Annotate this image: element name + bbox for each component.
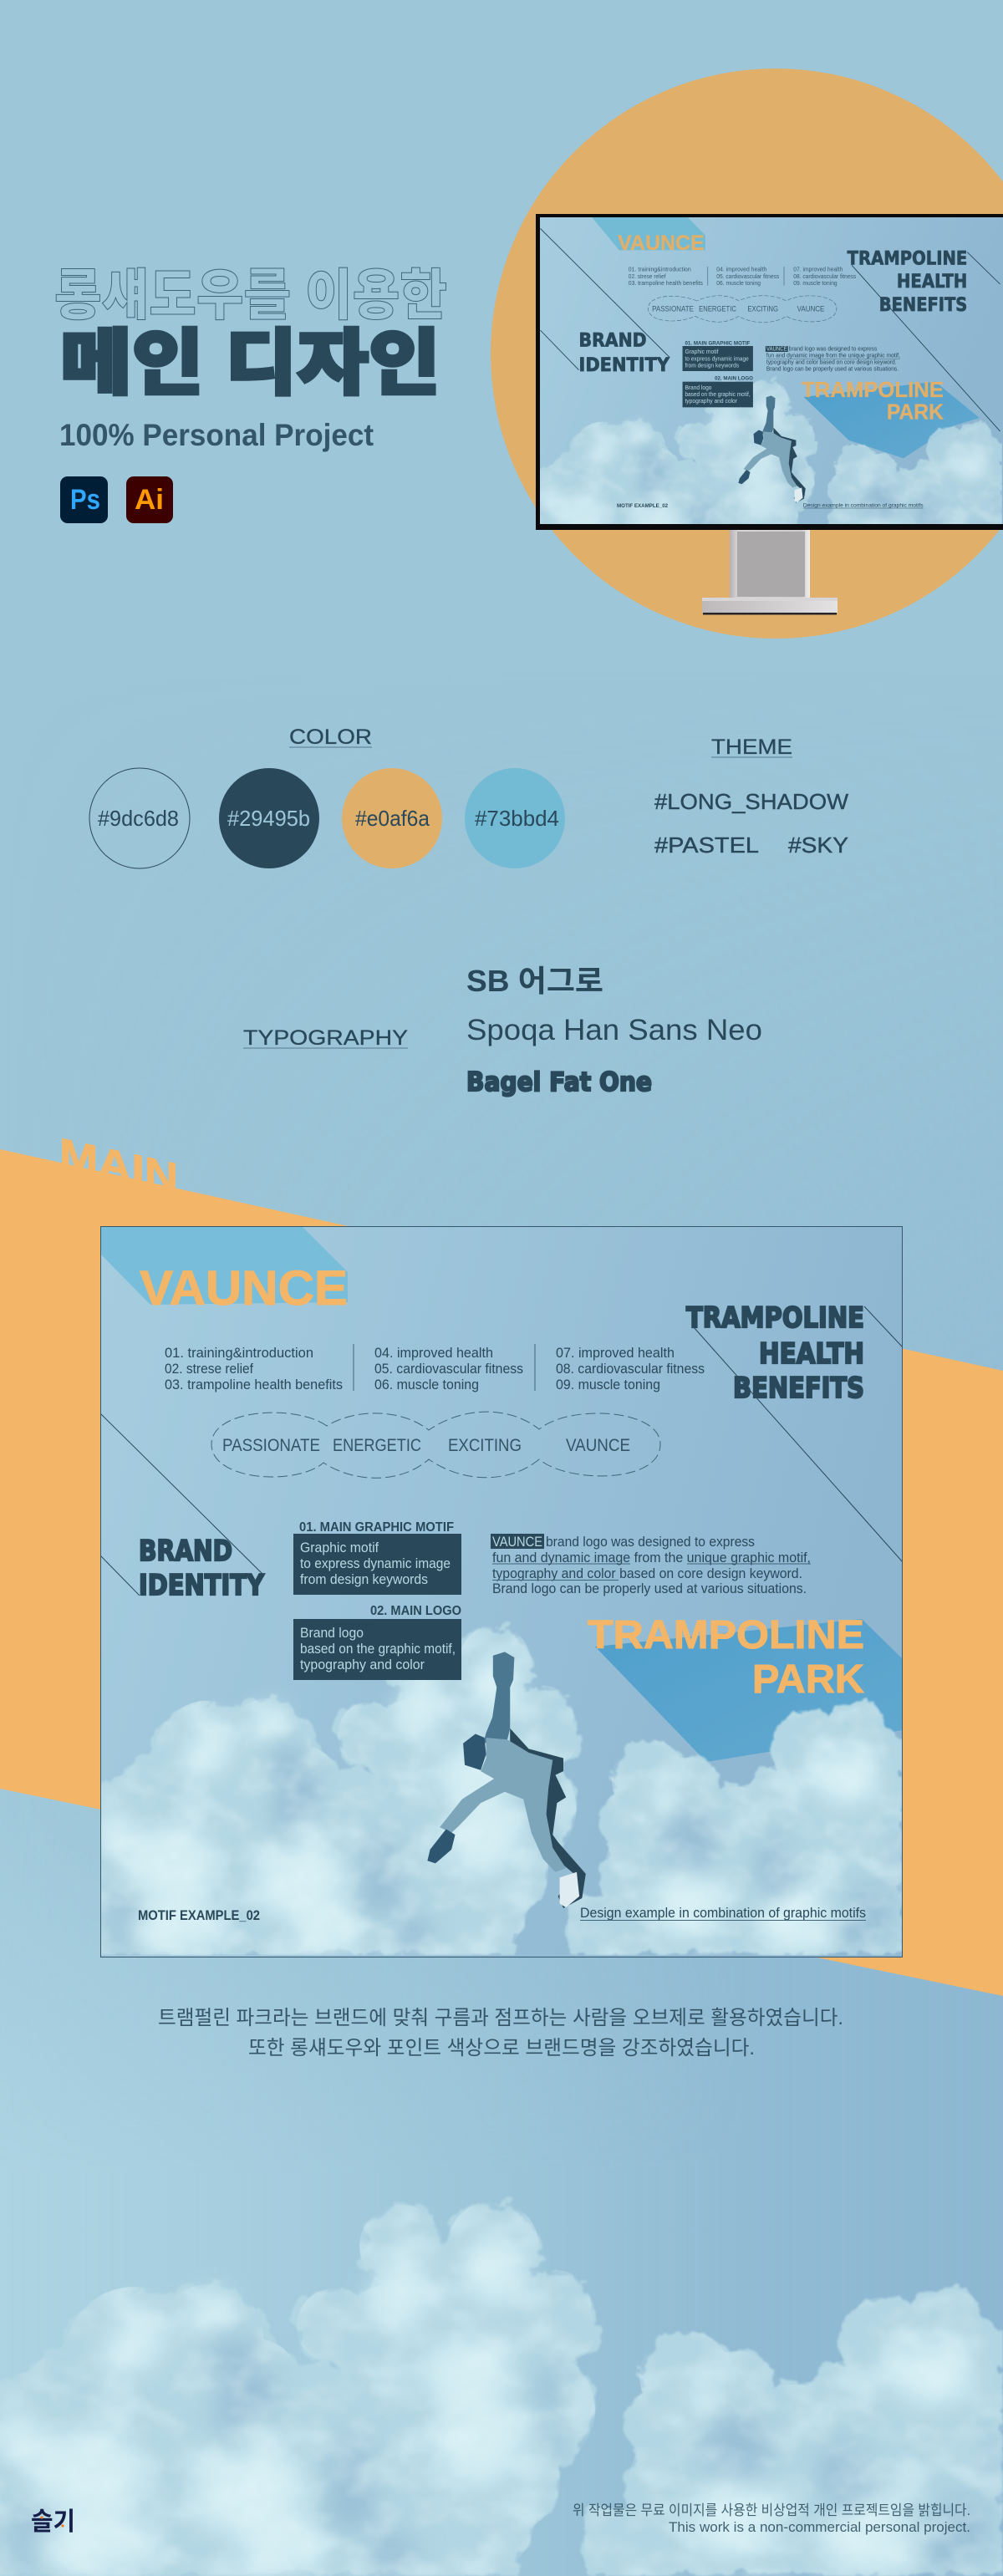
title block [54, 264, 447, 452]
description text [158, 2007, 843, 2059]
typography heading: TYPOGRAPHY [243, 1026, 408, 1050]
font sample: SB: SB 어그로 [466, 964, 603, 998]
brand paragraph [491, 1534, 811, 1596]
list column 1: 03. trampoline health benefits [165, 1377, 343, 1392]
long shadow: VAUNCE [100, 1226, 348, 1305]
orange background circle [491, 69, 1003, 639]
description text: 트램펄린 파크라는 브랜드에 맞춰 구름과 점프하는 사람을 오브제로 활용하였습니다. [158, 2007, 843, 2029]
headline: trampoline health benefits: TRAMPOLINE [686, 1301, 864, 1335]
brand paragraph: fun and dynamic image from the unique graphic motif, [492, 1550, 811, 1565]
list column 2: 05. cardiovascular fitness [374, 1362, 523, 1377]
theme tags [654, 789, 848, 858]
heading: trampoline park [588, 1613, 864, 1702]
motif box 01 [293, 1534, 461, 1595]
theme tags: #SKY [788, 832, 848, 858]
monitor mockup [526, 214, 1003, 615]
screen headline: BENEFITS [879, 295, 967, 316]
screen list: 03. trampoline health benefits [629, 279, 703, 287]
subtitle: 100% Personal Project [59, 418, 374, 452]
screen list: 01. training&introduction [629, 266, 691, 273]
heading: brand identity: BRAND [139, 1535, 232, 1568]
swatch #73bbd4 [465, 768, 565, 868]
monitor frame [536, 214, 1003, 530]
diagonal lines [100, 1306, 903, 1596]
screen list: 06. muscle toning [716, 279, 761, 287]
screen keywords: ENERGETIC [699, 304, 736, 313]
screen captions: Design example in combination of graphic motifs [803, 503, 924, 509]
screen headline: HEALTH [897, 272, 967, 293]
swatch #9dc6d8: #9dc6d8 [98, 806, 179, 831]
list [165, 1344, 705, 1392]
screen trampoline park [802, 377, 944, 424]
screen brand identity: BRAND [579, 330, 647, 351]
screen motif boxes: 01. MAIN GRAPHIC MOTIF [685, 341, 750, 347]
list column 3: 08. cardiovascular fitness [556, 1362, 705, 1377]
list column 3: 09. muscle toning [556, 1377, 660, 1392]
orange diagonal band [0, 1149, 1003, 1996]
heading: brand identity [139, 1535, 264, 1602]
headline: trampoline health benefits: HEALTH [759, 1337, 864, 1371]
screen paragraph: typography and color based on core design keyword. [766, 359, 897, 366]
screen trampoline park: PARK [887, 400, 944, 424]
screen trampoline park: TRAMPOLINE [802, 377, 944, 402]
motif box 01: from design keywords [300, 1571, 428, 1587]
list column 2: 06. muscle toning [374, 1377, 479, 1392]
screen motif boxes: from design keywords [685, 362, 739, 369]
icon: Photoshop [60, 476, 108, 523]
screen keywords: PASSIONATE [652, 304, 694, 313]
heading: trampoline park: TRAMPOLINE [588, 1613, 864, 1657]
motif label 01: 01. MAIN GRAPHIC MOTIF [299, 1520, 454, 1535]
screen captions: MOTIF EXAMPLE_02 [617, 503, 668, 509]
screen motif boxes: to express dynamic image [685, 355, 749, 362]
MAIN label: MAIN [59, 1129, 178, 1202]
color heading: COLOR [289, 725, 372, 749]
list column 1 [165, 1346, 343, 1392]
screen paragraph [766, 345, 900, 373]
keyword ellipses: VAUNCE [566, 1436, 630, 1455]
font sample: Bagel: Bagel Fat One [466, 1067, 652, 1097]
font sample: Spoqa: Spoqa Han Sans Neo [466, 1014, 762, 1046]
screen list: 07. improved health [793, 266, 843, 273]
brand paragraph: VAUNCE [492, 1534, 542, 1550]
main design panel [74, 1226, 905, 1957]
screen brand identity [580, 333, 670, 371]
swatch #e0af6a: #e0af6a [355, 806, 430, 831]
screen long shadow [592, 217, 705, 250]
icon: Illustrator [126, 476, 173, 523]
motif box 02 [293, 1619, 461, 1680]
screen list [629, 266, 856, 287]
description text: 또한 롱섀도우와 포인트 색상으로 브랜드명을 강조하였습니다. [248, 2037, 755, 2059]
headline: trampoline health benefits: BENEFITS [733, 1372, 864, 1405]
headline: trampoline health benefits [686, 1301, 864, 1405]
section: typography [243, 964, 762, 1097]
title outline line: 롱섀도우를 이용한 [54, 264, 447, 326]
brand paragraph: Brand logo can be properly used at various situations. [492, 1581, 807, 1596]
monitor screen [540, 217, 1003, 524]
swatch #29495b [219, 768, 319, 868]
VAUNCE logo: VAUNCE [140, 1261, 348, 1316]
jumping person [427, 1652, 586, 1908]
keyword ellipses: EXCITING [448, 1436, 522, 1455]
swatch #73bbd4: #73bbd4 [475, 806, 559, 831]
long shadow: TRAMPOLINE PARK [595, 1619, 903, 1762]
brand paragraph: brand logo was designed to express [546, 1534, 755, 1550]
screen brand identity: IDENTITY [579, 355, 670, 376]
screen list: 04. improved health [716, 266, 766, 273]
motif box 01: to express dynamic image [300, 1555, 451, 1571]
brand paragraph: typography and color based on core design keyword. [492, 1565, 802, 1581]
screen list: 02. strese relief [629, 272, 666, 280]
caption right: Design example in combination of graphic motifs [580, 1905, 866, 1921]
screen list: 08. cardiovascular fitness [793, 272, 856, 280]
screen list: 05. cardiovascular fitness [716, 272, 779, 280]
caption left: MOTIF EXAMPLE_02 [138, 1907, 260, 1923]
screen keywords [648, 296, 837, 323]
motif box 01: Graphic motif [300, 1540, 379, 1555]
list column 1: 02. strese relief [165, 1362, 253, 1377]
list column 3: 07. improved health [556, 1346, 675, 1361]
panel content [74, 1226, 905, 1957]
screen headline: TRAMPOLINE [848, 249, 967, 269]
motif box 02: Brand logo [300, 1625, 364, 1641]
screen motif boxes: Graphic motif [685, 348, 719, 355]
footer note: 위 작업물은 무료 이미지를 사용한 비상업적 개인 프로젝트임을 밝힙니다. [573, 2502, 970, 2518]
footer note: This work is a non-commercial personal project. [669, 2519, 970, 2535]
screen diagonal lines [540, 228, 1000, 431]
screen motif boxes [683, 341, 753, 407]
footer clouds [0, 2201, 1003, 2576]
panel border [100, 1227, 903, 1957]
screen keywords: VAUNCE [797, 304, 824, 313]
screen paragraph: Brand logo can be properly used at various situations. [766, 365, 899, 373]
screen captions [617, 503, 924, 509]
keyword ellipses [211, 1412, 660, 1478]
icon: Photoshop: Ps [70, 484, 100, 516]
screen paragraph: fun and dynamic image from the unique graphic motif, [766, 352, 900, 359]
list column 3 [556, 1346, 705, 1392]
theme tags: #PASTEL [654, 832, 759, 858]
theme heading: THEME [711, 736, 792, 759]
motif box 02: based on the graphic motif, [300, 1641, 456, 1657]
screen list: 09. muscle toning [793, 279, 838, 287]
swatch #9dc6d8 [89, 768, 190, 868]
screen keywords: EXCITING [747, 304, 778, 313]
heading: brand identity: IDENTITY [139, 1569, 264, 1602]
keyword ellipses: PASSIONATE [222, 1436, 320, 1455]
logo: 슬기 [31, 2508, 75, 2536]
monitor stand [702, 530, 838, 615]
section: color [89, 725, 565, 868]
page background [0, 1255, 1003, 2576]
screen VAUNCE: VAUNCE [618, 231, 705, 255]
screen headline [848, 249, 967, 316]
icon: Illustrator: Ai [135, 484, 164, 516]
motif label 02: 02. MAIN LOGO [370, 1604, 461, 1618]
screen paragraph: brand logo was designed to express [789, 345, 878, 353]
motif box 02: typography and color [300, 1657, 425, 1672]
screen motif boxes: 02. MAIN LOGO [715, 376, 753, 381]
screen clouds [540, 376, 1002, 524]
screen person [738, 395, 806, 503]
section: theme [654, 736, 848, 858]
screen paragraph: VAUNCE [766, 345, 787, 353]
title main line: 메인 디자인 [60, 323, 440, 404]
list column 2: 04. improved health [374, 1346, 493, 1361]
list column 1: 01. training&introduction [165, 1346, 313, 1361]
screen shadow 2 [804, 382, 980, 458]
screen motif boxes: typography and color [685, 397, 738, 405]
screen motif boxes: Brand logo [685, 384, 711, 391]
footer note [573, 2502, 970, 2535]
keyword ellipses: ENERGETIC [333, 1436, 421, 1455]
list column 2 [374, 1346, 523, 1392]
heading: trampoline park: PARK [752, 1657, 864, 1702]
clouds [74, 1625, 905, 1955]
screen motif boxes: based on the graphic motif, [685, 390, 751, 398]
swatch #29495b: #29495b [227, 806, 310, 831]
theme tags: #LONG_SHADOW [654, 789, 848, 814]
swatch #e0af6a [342, 768, 442, 868]
